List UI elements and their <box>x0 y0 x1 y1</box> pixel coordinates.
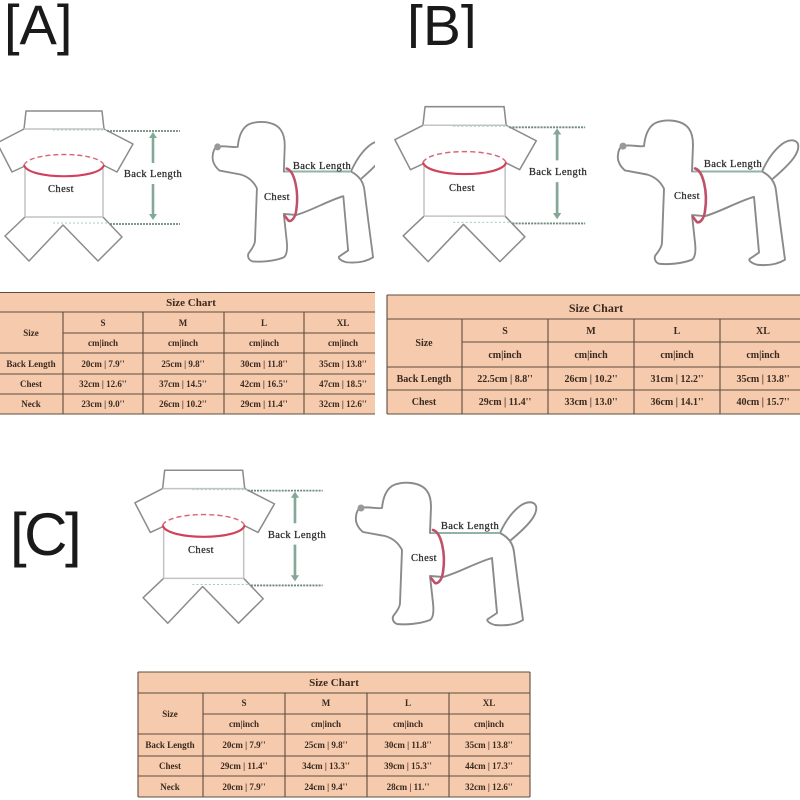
size table B: S <box>502 326 508 337</box>
size table A: 25cm | 9.8'' <box>161 359 205 369</box>
shirt diagram C: Back Length <box>268 530 327 541</box>
size table A: XL <box>337 318 349 328</box>
size table A: Chest <box>20 379 42 389</box>
size table B: cm|inch <box>574 350 608 361</box>
size table A: Size <box>23 328 39 338</box>
size table A: Neck <box>21 399 41 409</box>
size table A: 47cm | 18.5'' <box>319 379 367 389</box>
size table A: 35cm | 13.8'' <box>319 359 367 369</box>
size table C: S <box>241 698 247 708</box>
size table C: 34cm | 13.3'' <box>302 761 350 771</box>
shirt diagram C <box>135 470 327 623</box>
size table B: 22.5cm | 8.8'' <box>477 374 533 385</box>
size table A: 30cm | 11.8'' <box>240 359 288 369</box>
size table B: 31cm | 12.2'' <box>650 374 704 385</box>
dog diagram B: Back Length <box>704 159 763 170</box>
dog diagram B: Chest <box>674 191 700 202</box>
size table A: L <box>261 318 267 328</box>
size table C <box>138 672 530 797</box>
size table A: 37cm | 14.5'' <box>159 379 207 389</box>
size table A: S <box>100 318 106 328</box>
size table A: cm|inch <box>168 338 198 348</box>
size table A: Size Chart <box>166 297 216 309</box>
size table B: 36cm | 14.1'' <box>650 397 704 408</box>
size table B: 33cm | 13.0'' <box>564 397 618 408</box>
size table C: 20cm | 7.9'' <box>222 740 266 750</box>
size table C: 32cm | 12.6'' <box>465 782 513 792</box>
size table A: 20cm | 7.9'' <box>81 359 125 369</box>
size table C: 25cm | 9.8'' <box>304 740 348 750</box>
size table B: cm|inch <box>488 350 522 361</box>
size table C: XL <box>483 698 495 708</box>
size table A: 32cm | 12.6'' <box>79 379 127 389</box>
size table C: 24cm | 9.4'' <box>304 782 348 792</box>
dog diagram C <box>356 483 536 625</box>
panel: size C <box>10 470 536 797</box>
size table B: Size Chart <box>569 301 623 315</box>
size table C: Neck <box>160 782 180 792</box>
size table C: cm|inch <box>393 719 423 729</box>
size table B: 40cm | 15.7'' <box>736 397 790 408</box>
size table A <box>0 292 375 414</box>
dog diagram B <box>618 120 798 265</box>
size table C: 20cm | 7.9'' <box>222 782 266 792</box>
size table C: 28cm | 11.'' <box>387 782 429 792</box>
size table C: 35cm | 13.8'' <box>465 740 513 750</box>
dog diagram A: Chest <box>264 192 290 203</box>
size table B: L <box>674 326 681 337</box>
dog diagram C: Chest <box>411 553 437 564</box>
dog diagram A: Back Length <box>293 161 352 172</box>
size table C: cm|inch <box>229 719 259 729</box>
size table A: cm|inch <box>249 338 279 348</box>
size table A: 26cm | 10.2'' <box>159 399 207 409</box>
size table C: 44cm | 17.3'' <box>465 761 513 771</box>
dog diagram A <box>213 122 387 263</box>
size table B: cm|inch <box>660 350 694 361</box>
shirt diagram B <box>395 107 588 262</box>
panel: size A <box>0 0 387 414</box>
dog diagram C: Back Length <box>441 521 500 532</box>
size table A: cm|inch <box>88 338 118 348</box>
size table B: M <box>586 326 596 337</box>
size table C: Chest <box>159 761 181 771</box>
size table B: Size <box>415 338 433 349</box>
panel: size B <box>387 0 800 414</box>
heading: C: [C] <box>10 501 79 568</box>
size table C: M <box>322 698 331 708</box>
size table A: 42cm | 16.5'' <box>240 379 288 389</box>
size table B: XL <box>756 326 770 337</box>
size table B: Back Length <box>397 374 452 385</box>
size table C: Size <box>162 709 178 719</box>
size table C: L <box>405 698 411 708</box>
shirt diagram C: Chest <box>188 545 214 556</box>
size table C: 30cm | 11.8'' <box>384 740 432 750</box>
size table B: 26cm | 10.2'' <box>564 374 618 385</box>
shirt diagram A <box>0 111 183 261</box>
size table B: 29cm | 11.4'' <box>479 397 531 408</box>
size table C: Back Length <box>145 740 195 750</box>
size table A: M <box>179 318 188 328</box>
size table C: 29cm | 11.4'' <box>220 761 268 771</box>
size table B: 35cm | 13.8'' <box>736 374 790 385</box>
size table B: Chest <box>412 397 437 408</box>
size table B <box>387 295 800 414</box>
size table C: 39cm | 15.3'' <box>384 761 432 771</box>
size table A: 29cm | 11.4'' <box>240 399 288 409</box>
size table B: cm|inch <box>746 350 780 361</box>
size table C: Size Chart <box>309 677 359 689</box>
size table C: cm|inch <box>474 719 504 729</box>
shirt diagram A: Back Length <box>124 169 183 180</box>
size table A: cm|inch <box>328 338 358 348</box>
shirt diagram B: Chest <box>449 183 475 194</box>
shirt diagram A: Chest <box>48 184 74 195</box>
size table A: 23cm | 9.0'' <box>81 399 125 409</box>
shirt diagram B: Back Length <box>529 167 588 178</box>
size table A: Back Length <box>6 359 56 369</box>
size table C: cm|inch <box>311 719 341 729</box>
size table A: 32cm | 12.6'' <box>319 399 367 409</box>
